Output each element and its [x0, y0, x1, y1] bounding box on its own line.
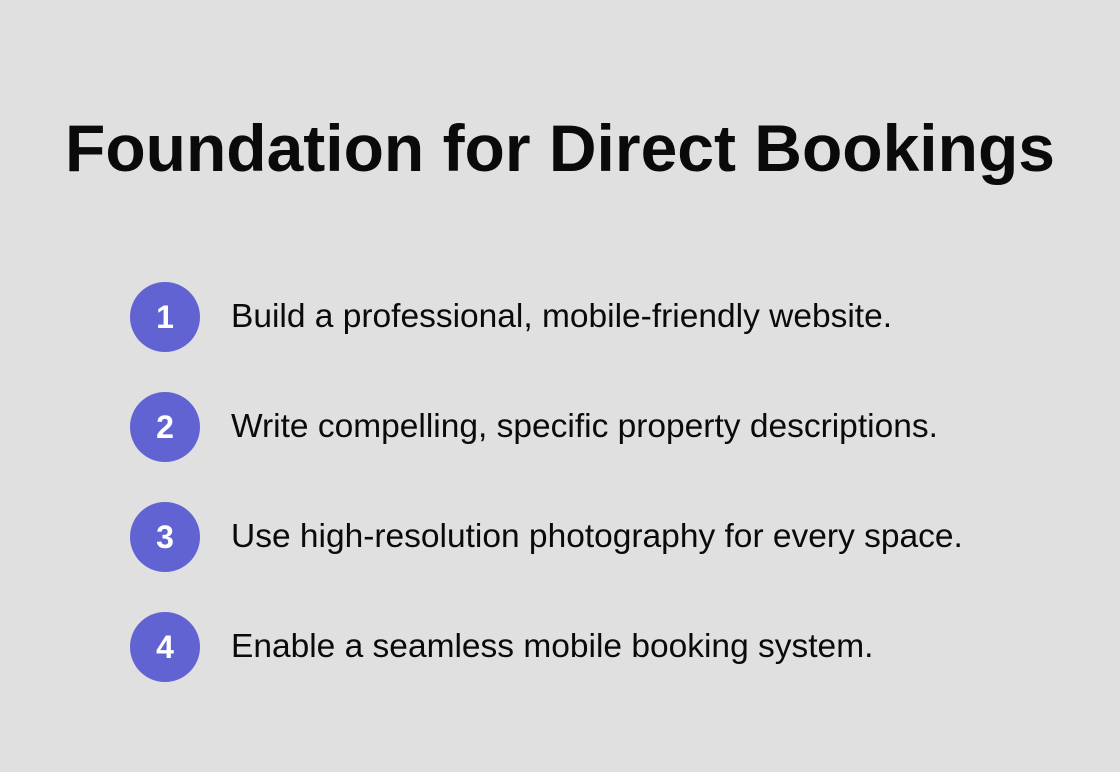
icon: number 4: [130, 612, 200, 682]
icon: number 1: 1: [156, 299, 174, 335]
text: item 4: Enable a seamless mobile booking system.: [231, 628, 873, 665]
icon: number 4: 4: [156, 629, 174, 665]
title: Foundation for Direct Bookings: [65, 111, 1055, 185]
icon: number 2: [130, 392, 200, 462]
item 2: [130, 392, 938, 462]
item 4: [130, 612, 873, 682]
icon: number 3: 3: [156, 519, 174, 555]
icon: number 3: [130, 502, 200, 572]
text: item 2: Write compelling, specific property descriptions.: [231, 408, 938, 445]
text: item 1: Build a professional, mobile-friendly website.: [231, 298, 892, 335]
text: item 3: Use high-resolution photography for every space.: [231, 518, 963, 555]
item 3: [130, 502, 963, 572]
icon: number 1: [130, 282, 200, 352]
icon: number 2: 2: [156, 409, 174, 445]
item 1: [130, 282, 892, 352]
